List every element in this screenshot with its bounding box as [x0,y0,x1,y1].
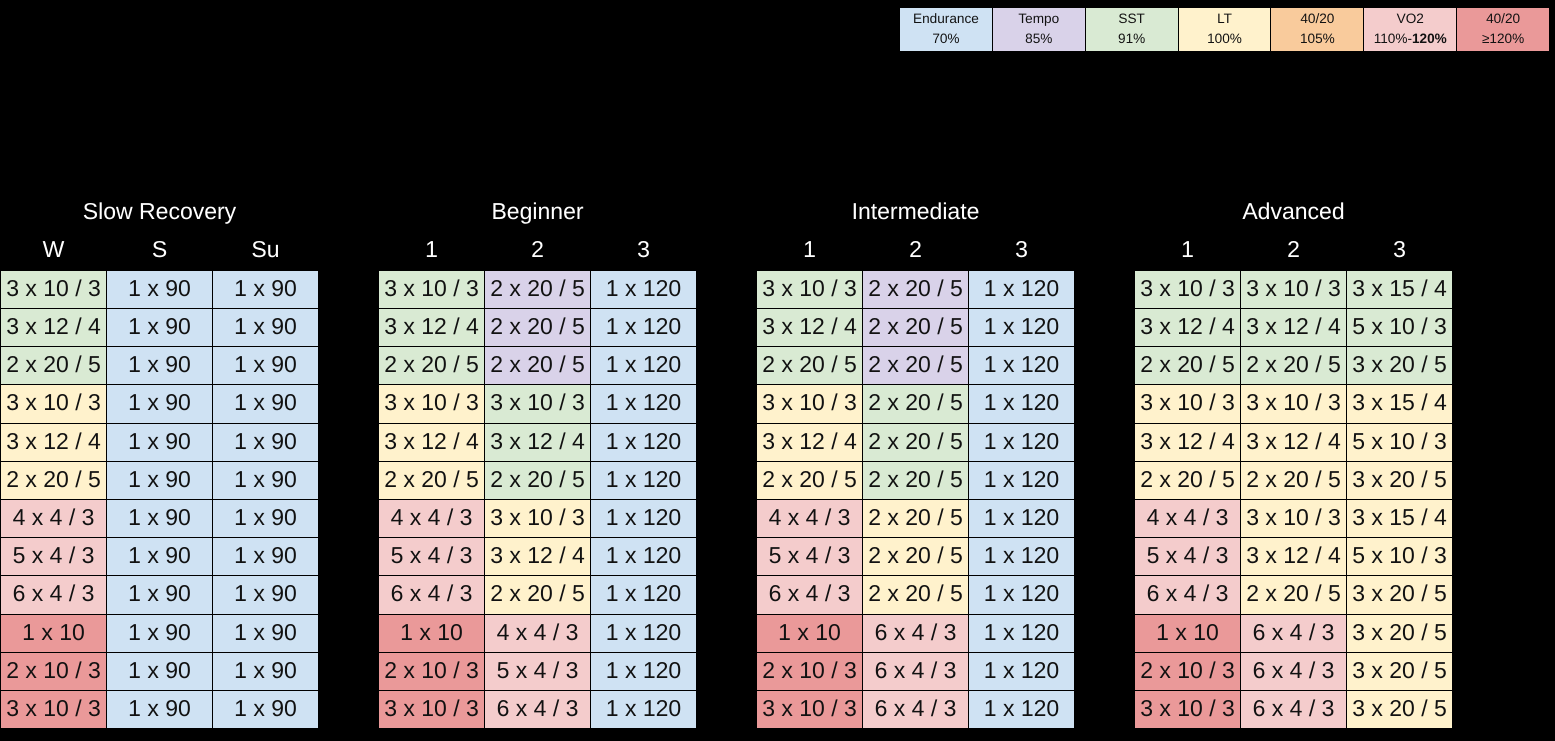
table: Slow Recovery schedule: 1 x 90 [234,542,297,568]
table: Intermediate schedule: 3 x 12 / 4 [762,428,857,454]
table: Advanced schedule: 2 x 20 / 5 [1246,351,1341,377]
table: Advanced schedule: 3 x 10 / 3 [1140,275,1235,301]
table: Slow Recovery schedule: 5 x 4 / 3 [13,542,94,568]
table: Beginner schedule: 2 x 20 / 5 [384,466,479,492]
table: Slow Recovery schedule [1,271,318,728]
table: Intermediate schedule: 2 x 20 / 5 [868,428,963,454]
table: Advanced schedule: 2 x 20 / 5 [1246,580,1341,606]
column headers: 1 [425,236,438,262]
table: Intermediate schedule: 6 x 4 / 3 [875,695,956,721]
legend: VO2 [1364,8,1456,51]
column headers: Su [251,236,280,262]
table: Advanced schedule: 6 x 4 / 3 [1253,619,1334,645]
table: Intermediate schedule [757,271,1074,728]
table: Beginner schedule: 3 x 12 / 4 [384,313,479,339]
table: Slow Recovery schedule: 2 x 20 / 5 [6,351,101,377]
table: Beginner schedule: 1 x 120 [606,275,681,301]
table: Beginner schedule: 6 x 4 / 3 [497,695,578,721]
table: Intermediate schedule: 1 x 120 [984,313,1059,339]
legend: Tempo: Tempo [1018,11,1059,26]
table: Advanced schedule: 3 x 12 / 4 [1140,313,1235,339]
table: Slow Recovery schedule: 3 x 12 / 4 [6,313,101,339]
table: Advanced schedule: 3 x 12 / 4 [1246,428,1341,454]
table: Advanced schedule: 3 x 20 / 5 [1352,580,1447,606]
table: Intermediate schedule: 3 x 10 / 3 [762,695,857,721]
table: Slow Recovery schedule: 1 x 90 [234,504,297,530]
table: Advanced schedule: 3 x 12 / 4 [1246,313,1341,339]
table: Slow Recovery schedule: 1 x 90 [234,389,297,415]
table: Beginner schedule: 1 x 120 [606,351,681,377]
column headers [42,236,280,262]
column headers: 3 [1015,236,1028,262]
legend: SST: SST [1118,11,1145,26]
table: Slow Recovery schedule: 1 x 90 [128,466,191,492]
table: Intermediate schedule: 4 x 4 / 3 [769,504,850,530]
table: Advanced schedule: 2 x 20 / 5 [1140,466,1235,492]
table: Intermediate schedule: 1 x 120 [984,657,1059,683]
table: Advanced schedule: 3 x 20 / 5 [1352,657,1447,683]
table: Advanced schedule: 1 x 10 [1156,619,1219,645]
legend: 40/20 at 120% or more: ≥120% [1482,30,1524,46]
table: Slow Recovery schedule: 4 x 4 / 3 [13,504,94,530]
table: Slow Recovery schedule: 1 x 90 [128,351,191,377]
table: Slow Recovery schedule: 1 x 90 [128,275,191,301]
column headers: 3 [1393,236,1406,262]
table: Advanced schedule: 5 x 10 / 3 [1352,313,1447,339]
table: Beginner schedule: 2 x 20 / 5 [490,580,585,606]
table: Intermediate schedule: 6 x 4 / 3 [769,580,850,606]
table: Intermediate schedule: 1 x 120 [984,580,1059,606]
column headers: 2 [1287,236,1300,262]
table: Slow Recovery schedule: 3 x 10 / 3 [6,695,101,721]
table: Beginner schedule: 3 x 12 / 4 [490,428,585,454]
table: Advanced schedule: 3 x 20 / 5 [1352,351,1447,377]
table: Advanced schedule: 5 x 10 / 3 [1352,428,1447,454]
legend: VO2: 110%-120% [1374,30,1447,46]
legend: Endurance: 70% [932,30,960,46]
table: Beginner schedule: 1 x 120 [606,504,681,530]
legend: Endurance [900,8,992,51]
legend: LT [1179,8,1270,51]
table: Slow Recovery schedule: 6 x 4 / 3 [13,580,94,606]
heading: Advanced: Advanced [1242,198,1345,224]
table: Slow Recovery schedule: 1 x 90 [128,428,191,454]
table: Beginner schedule: 2 x 20 / 5 [490,313,585,339]
table: Beginner schedule: 3 x 10 / 3 [384,389,479,415]
table: Slow Recovery schedule: 1 x 90 [234,428,297,454]
panel: Advanced [1135,198,1452,728]
table: Slow Recovery schedule: 1 x 90 [234,466,297,492]
table: Intermediate schedule: 6 x 4 / 3 [875,619,956,645]
table: Beginner schedule: 4 x 4 / 3 [497,619,578,645]
column headers: S [152,236,167,262]
table: Slow Recovery schedule: 2 x 10 / 3 [6,657,101,683]
table: Beginner schedule: 3 x 10 / 3 [490,504,585,530]
table: Beginner schedule: 2 x 20 / 5 [490,466,585,492]
table: Intermediate schedule: 2 x 20 / 5 [868,580,963,606]
table: Advanced schedule: 3 x 15 / 4 [1352,275,1447,301]
table: Beginner schedule: 2 x 20 / 5 [490,351,585,377]
table: Advanced schedule: 3 x 12 / 4 [1246,542,1341,568]
legend: 40/20 at 105%: 105% [1300,30,1335,46]
table: Intermediate schedule: 1 x 10 [778,619,841,645]
table: Beginner schedule: 1 x 120 [606,466,681,492]
table: Beginner schedule: 2 x 20 / 5 [384,351,479,377]
legend: SST [1086,8,1178,51]
table: Slow Recovery schedule: 1 x 90 [234,351,297,377]
table: Intermediate schedule: 1 x 120 [984,466,1059,492]
table: Intermediate schedule: 3 x 10 / 3 [762,275,857,301]
table: Beginner schedule: 1 x 120 [606,542,681,568]
table: Slow Recovery schedule: 3 x 10 / 3 [6,275,101,301]
table: Beginner schedule: 2 x 10 / 3 [384,657,479,683]
heading: Beginner: Beginner [491,198,584,224]
legend: LT: 100% [1207,30,1242,46]
table: Beginner schedule: 1 x 120 [606,619,681,645]
table: Intermediate schedule: 1 x 120 [984,351,1059,377]
table: Slow Recovery schedule: 3 x 10 / 3 [6,389,101,415]
table: Intermediate schedule: 1 x 120 [984,504,1059,530]
table: Slow Recovery schedule: 1 x 90 [234,695,297,721]
table: Intermediate schedule: 1 x 120 [984,275,1059,301]
table: Advanced schedule: 3 x 10 / 3 [1140,695,1235,721]
table: Intermediate schedule: 2 x 20 / 5 [868,542,963,568]
panel: Intermediate [757,198,1074,728]
table: Advanced schedule: 3 x 10 / 3 [1246,275,1341,301]
panel: Beginner [379,198,696,728]
table: Slow Recovery schedule: 1 x 90 [128,695,191,721]
table: Beginner schedule: 3 x 12 / 4 [490,542,585,568]
table: Slow Recovery schedule: 1 x 90 [234,580,297,606]
table: Advanced schedule [1135,271,1452,728]
table: Slow Recovery schedule: 1 x 10 [22,619,85,645]
legend: Tempo [993,8,1085,51]
table: Intermediate schedule: 3 x 10 / 3 [762,389,857,415]
legend: 40/20 at 120% or more [1457,8,1549,51]
column headers [425,236,650,262]
table: Slow Recovery schedule: 1 x 90 [128,313,191,339]
table: Beginner schedule: 1 x 120 [606,695,681,721]
table: Advanced schedule: 3 x 20 / 5 [1352,619,1447,645]
column headers [1181,236,1406,262]
table: Advanced schedule: 6 x 4 / 3 [1253,657,1334,683]
table: Intermediate schedule: 1 x 120 [984,695,1059,721]
table: Intermediate schedule: 2 x 20 / 5 [762,466,857,492]
heading: Slow Recovery: Slow Recovery [83,198,236,224]
table: Advanced schedule: 3 x 15 / 4 [1352,504,1447,530]
table: Beginner schedule: 2 x 20 / 5 [490,275,585,301]
column headers: 2 [909,236,922,262]
table: Slow Recovery schedule: 1 x 90 [128,389,191,415]
table: Beginner schedule: 4 x 4 / 3 [391,504,472,530]
table: Slow Recovery schedule: 1 x 90 [234,657,297,683]
table: Intermediate schedule: 2 x 10 / 3 [762,657,857,683]
table: Slow Recovery schedule: 1 x 90 [234,275,297,301]
column headers [803,236,1028,262]
column headers: 1 [1181,236,1194,262]
table: Slow Recovery schedule: 1 x 90 [128,619,191,645]
table: Slow Recovery schedule: 1 x 90 [128,542,191,568]
table: Advanced schedule: 3 x 10 / 3 [1140,389,1235,415]
table: Advanced schedule: 2 x 10 / 3 [1140,657,1235,683]
table: Intermediate schedule: 3 x 12 / 4 [762,313,857,339]
panel: Slow Recovery [1,198,318,728]
table: Slow Recovery schedule: 1 x 90 [234,619,297,645]
table: Intermediate schedule: 2 x 20 / 5 [868,313,963,339]
table: Intermediate schedule: 6 x 4 / 3 [875,657,956,683]
table: Beginner schedule: 5 x 4 / 3 [497,657,578,683]
table: Advanced schedule: 3 x 20 / 5 [1352,466,1447,492]
table: Beginner schedule: 6 x 4 / 3 [391,580,472,606]
table: Beginner schedule: 1 x 10 [400,619,463,645]
legend: 40/20 at 105% [1271,8,1363,51]
table: Advanced schedule: 5 x 4 / 3 [1147,542,1228,568]
table: Intermediate schedule: 1 x 120 [984,389,1059,415]
legend: Endurance: Endurance [913,11,979,26]
column headers: W [43,236,64,262]
table: Slow Recovery schedule: 1 x 90 [128,657,191,683]
legend: 40/20 at 105%: 40/20 [1300,11,1334,26]
table: Beginner schedule: 3 x 10 / 3 [384,275,479,301]
table: Advanced schedule: 3 x 15 / 4 [1352,389,1447,415]
table: Intermediate schedule: 5 x 4 / 3 [769,542,850,568]
column headers: 3 [637,236,650,262]
table: Beginner schedule: 1 x 120 [606,389,681,415]
table: Beginner schedule: 5 x 4 / 3 [391,542,472,568]
table: Beginner schedule: 3 x 10 / 3 [384,695,479,721]
table: Intermediate schedule: 2 x 20 / 5 [868,504,963,530]
legend: SST: 91% [1118,30,1145,46]
table: Intermediate schedule: 2 x 20 / 5 [868,389,963,415]
table: Slow Recovery schedule: 1 x 90 [128,504,191,530]
table: Intermediate schedule: 1 x 120 [984,619,1059,645]
legend: VO2: VO2 [1397,11,1424,26]
table: Intermediate schedule: 1 x 120 [984,542,1059,568]
table: Advanced schedule: 3 x 20 / 5 [1352,695,1447,721]
table: Beginner schedule: 1 x 120 [606,657,681,683]
table: Advanced schedule: 6 x 4 / 3 [1253,695,1334,721]
table: Intermediate schedule: 2 x 20 / 5 [868,466,963,492]
legend: Tempo: 85% [1025,30,1052,46]
table: Beginner schedule: 1 x 120 [606,313,681,339]
table: Intermediate schedule: 2 x 20 / 5 [762,351,857,377]
table: Beginner schedule [379,271,696,728]
table: Intermediate schedule: 2 x 20 / 5 [868,275,963,301]
table: Slow Recovery schedule: 1 x 90 [234,313,297,339]
table: Advanced schedule: 4 x 4 / 3 [1147,504,1228,530]
heading: Intermediate: Intermediate [852,198,979,224]
table: Intermediate schedule: 1 x 120 [984,428,1059,454]
table: Advanced schedule: 2 x 20 / 5 [1246,466,1341,492]
table: Advanced schedule: 3 x 12 / 4 [1140,428,1235,454]
column headers: 2 [531,236,544,262]
table: Advanced schedule: 3 x 10 / 3 [1246,389,1341,415]
table: Slow Recovery schedule: 2 x 20 / 5 [6,466,101,492]
table: Slow Recovery schedule: 1 x 90 [128,580,191,606]
table: Slow Recovery schedule: 3 x 12 / 4 [6,428,101,454]
table: Beginner schedule: 3 x 12 / 4 [384,428,479,454]
legend: LT: LT [1217,11,1232,26]
table: Advanced schedule: 3 x 10 / 3 [1246,504,1341,530]
legend [900,8,1549,51]
table: Advanced schedule: 2 x 20 / 5 [1140,351,1235,377]
column headers: 1 [803,236,816,262]
table: Advanced schedule: 5 x 10 / 3 [1352,542,1447,568]
table: Beginner schedule: 1 x 120 [606,580,681,606]
legend: 40/20 at 120% or more: 40/20 [1486,11,1520,26]
table: Beginner schedule: 3 x 10 / 3 [490,389,585,415]
table: Intermediate schedule: 2 x 20 / 5 [868,351,963,377]
table: Advanced schedule: 6 x 4 / 3 [1147,580,1228,606]
table: Beginner schedule: 1 x 120 [606,428,681,454]
